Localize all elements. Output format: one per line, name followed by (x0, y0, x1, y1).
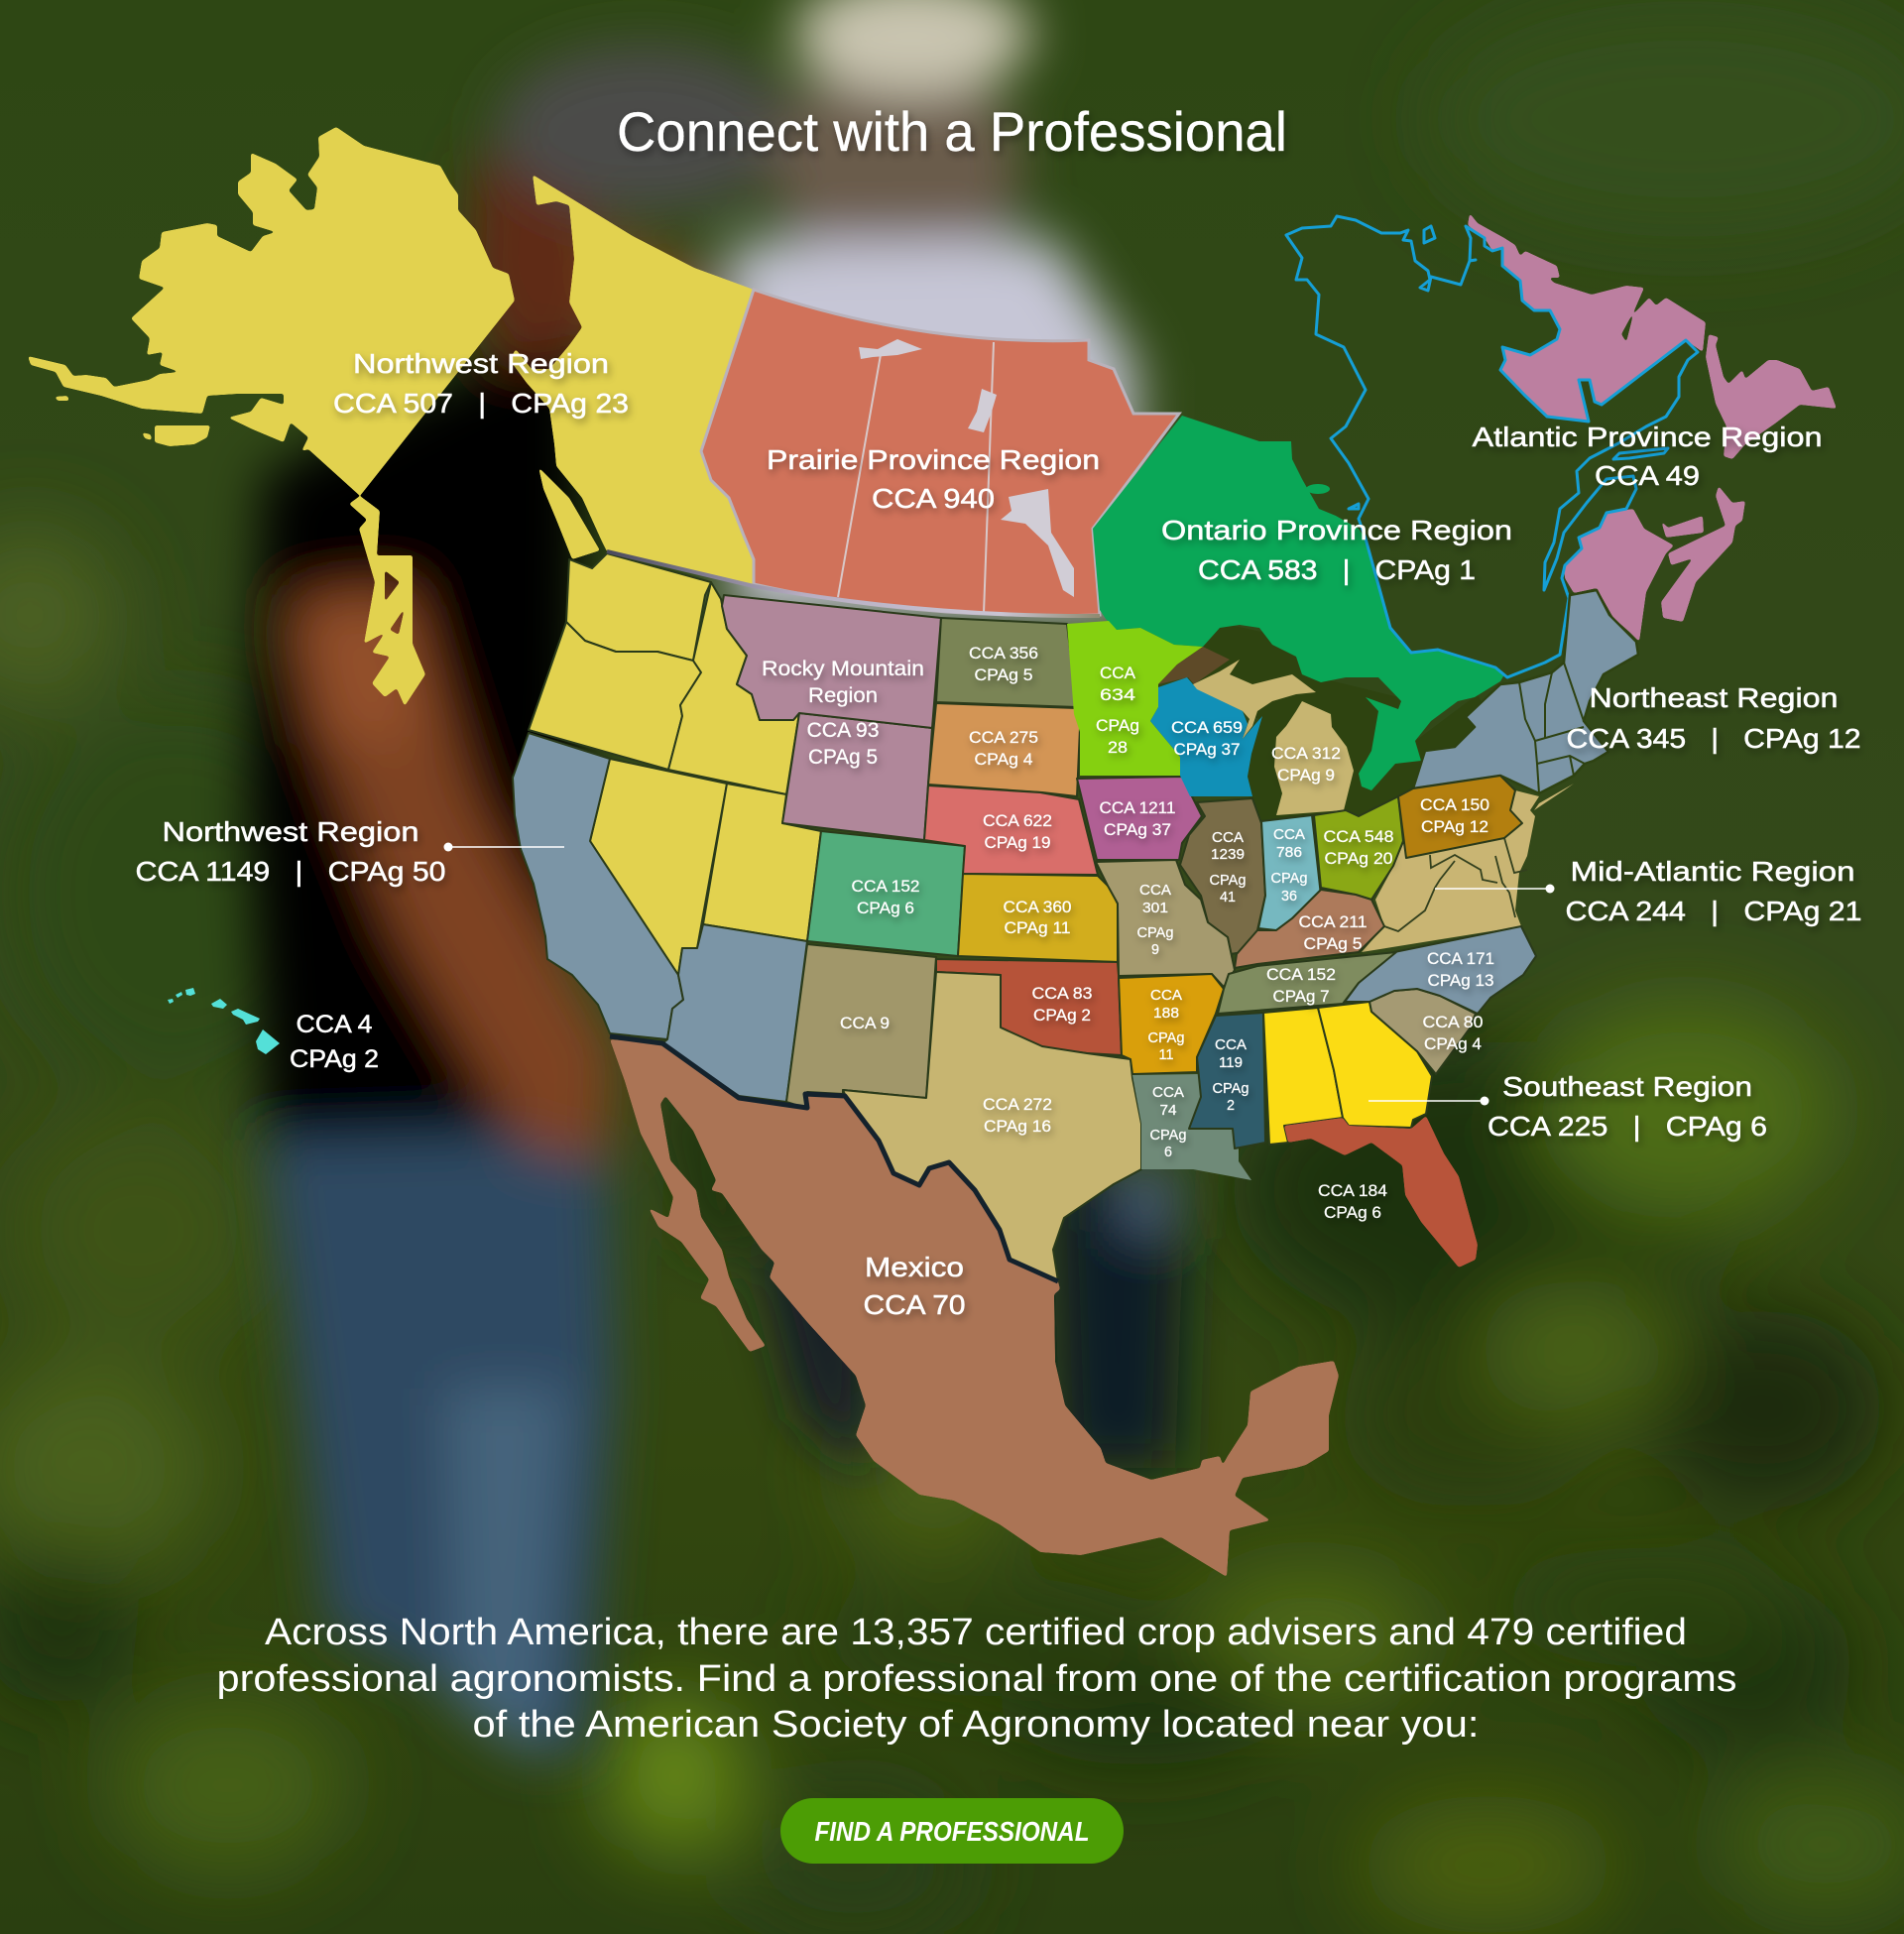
label: Hawaii (290, 1011, 379, 1073)
label: Prairie Province Region (767, 444, 1100, 514)
button: find a professional: FIND A PROFESSIONAL (815, 1816, 1089, 1847)
state: Arkansas (1119, 974, 1224, 1074)
label: Rocky Mountain Region (762, 658, 924, 769)
label: Indiana: CCA (1273, 826, 1305, 843)
label: Southeast Region: CCA 225 | CPAg 6 (1488, 1111, 1767, 1142)
state: Missouri (1096, 860, 1235, 987)
label: Northeast Region (1567, 682, 1860, 754)
state: Michigan (1193, 660, 1354, 815)
state: Kentucky (1235, 890, 1384, 968)
label: Iowa (1099, 798, 1176, 839)
Lake Superior tip (1158, 647, 1230, 684)
label: Minnesota: 28 (1108, 738, 1128, 757)
label: Illinois: CCA (1212, 829, 1244, 846)
state: Illinois (1180, 798, 1265, 954)
label: Arkansas: 11 (1158, 1046, 1174, 1063)
state: Wisconsin (1150, 677, 1262, 796)
state: Kansas (958, 874, 1118, 962)
state: Idaho (668, 582, 799, 794)
label: South Dakota: CCA 275 (969, 728, 1038, 747)
label: Mexico: Mexico (865, 1252, 964, 1282)
label: North Dakota: CPAg 5 (974, 665, 1033, 684)
white shirt (729, 238, 1135, 615)
text block: summary paragraph (216, 1612, 1737, 1746)
state: Oregon (529, 622, 701, 770)
label: Missouri: 9 (1151, 941, 1159, 958)
label: Wisconsin: CPAg 37 (1174, 740, 1240, 759)
label: Nebraska: CPAg 19 (984, 833, 1051, 852)
Newfoundland (1706, 334, 1837, 459)
label: Florida (1318, 1181, 1387, 1222)
label: Northwest Region Alaska and BC: CCA 507 | CPAg 23 (333, 388, 629, 419)
label: Ontario Province Region: CCA 583 | CPAg 1 (1198, 554, 1476, 585)
arm and hand (298, 585, 615, 1160)
label: Tennessee: CPAg 7 (1273, 987, 1329, 1006)
label: Kentucky: CCA 211 (1299, 912, 1367, 931)
label: Louisiana: 74 (1160, 1102, 1176, 1119)
label: Illinois: 41 (1220, 889, 1236, 906)
label: Colorado (851, 877, 920, 917)
label: Pennsylvania: CCA 150 (1420, 795, 1489, 814)
label: Atlantic Province Region: CCA 49 (1595, 460, 1700, 491)
label: Arkansas: CPAg (1148, 1029, 1184, 1046)
state: Nebraska (924, 786, 1098, 875)
label: Louisiana: CPAg (1150, 1127, 1186, 1144)
text block: summary paragraph: professional agronomists. Find a professional from one of the certification programs (216, 1658, 1737, 1700)
label: Kentucky (1299, 912, 1367, 953)
label: Southeast Region (1488, 1071, 1767, 1142)
label: Illinois (1210, 829, 1246, 906)
label: Mid-Atlantic Region (1565, 856, 1862, 926)
New Brunswick (1564, 509, 1674, 642)
label: Louisiana: 6 (1164, 1144, 1172, 1160)
label: Rocky Mountain Region: CCA 93 (807, 719, 879, 742)
label: Mississippi (1212, 1036, 1250, 1114)
label: Florida: CPAg 6 (1324, 1203, 1381, 1222)
label: Missouri: 301 (1142, 900, 1168, 916)
state: Oklahoma (936, 959, 1122, 1055)
dark legs person 2 (1051, 1170, 1185, 1468)
lakes in prairie provinces (859, 339, 1074, 597)
label: Rocky Mountain Region: Rocky Mountain (762, 658, 924, 680)
state: South Carolina (1369, 989, 1476, 1074)
Nova Scotia (1661, 486, 1745, 622)
label: North Carolina (1427, 949, 1494, 990)
label: Ohio (1323, 827, 1394, 868)
Great Lakes shadow (1175, 623, 1497, 823)
label: Ontario Province Region (1161, 515, 1512, 585)
label: Mississippi: CPAg (1212, 1080, 1250, 1097)
label: Rocky Mountain Region: Region (808, 684, 878, 707)
label: North Dakota (969, 644, 1038, 684)
Hawaii islands (168, 988, 280, 1054)
label: Southeast Region: Southeast Region (1502, 1071, 1752, 1102)
state: Montana (722, 595, 941, 728)
state: Washington (566, 553, 711, 661)
label: Colorado: CCA 152 (851, 877, 920, 896)
state: Colorado (807, 831, 965, 956)
label: Kentucky: CPAg 5 (1303, 934, 1363, 953)
Quebec outline (1286, 216, 1698, 677)
panel: Prairie Province Region (701, 290, 1179, 616)
map of North America (28, 127, 1837, 1577)
label: Arkansas: CCA (1150, 987, 1182, 1004)
label: Rocky Mountain Region: CPAg 5 (808, 746, 878, 769)
label: Illinois: CPAg (1210, 872, 1246, 889)
text block: summary paragraph: of the American Society of Agronomy located near you: (472, 1704, 1480, 1746)
US-Mexico border line (610, 1036, 1058, 1281)
label: Arkansas: 188 (1153, 1005, 1179, 1022)
Quebec and Labrador (1468, 213, 1706, 422)
label: Hawaii: CPAg 2 (290, 1045, 379, 1073)
panel: Mid-Atlantic Region (1362, 784, 1574, 952)
jeans person 1 (263, 1131, 615, 1765)
panel: Atlantic Province Region (1286, 213, 1837, 677)
label: Minnesota: 634 (1100, 685, 1135, 704)
leader line: Southeast Region (1368, 1097, 1489, 1105)
state: Tennessee (1218, 952, 1396, 1014)
label: Iowa: CPAg 37 (1104, 820, 1171, 839)
label: Northwest Region west coast (135, 816, 446, 887)
label: Wisconsin: CCA 659 (1171, 718, 1243, 737)
state: Florida (1284, 1116, 1478, 1268)
label: Kansas: CPAg 11 (1004, 918, 1071, 937)
label: Ontario Province Region: Ontario Province Region (1161, 515, 1512, 545)
US-Canada border line (607, 551, 1100, 616)
label: Missouri: CCA (1139, 882, 1171, 899)
label: Louisiana: CCA (1152, 1084, 1184, 1101)
state: Indiana (1258, 815, 1321, 930)
label: Atlantic Province Region: Atlantic Province Region (1472, 422, 1823, 452)
label: Michigan: CCA 312 (1271, 744, 1341, 763)
state: North Dakota (936, 618, 1077, 707)
label: Hawaii: CCA 4 (296, 1011, 373, 1038)
label: Nebraska (983, 811, 1052, 852)
leader line: Mid-Atlantic Region (1435, 885, 1555, 893)
state: Ohio (1314, 796, 1403, 900)
label: Mississippi: 119 (1219, 1054, 1243, 1071)
label: Kansas: CCA 360 (1004, 898, 1071, 916)
label: Mississippi: CCA (1215, 1036, 1247, 1053)
label: Atlantic Province Region (1472, 422, 1823, 491)
label: North Dakota: CCA 356 (969, 644, 1038, 663)
label: Ohio: CCA 548 (1323, 827, 1394, 846)
label: Florida: CCA 184 (1318, 1181, 1387, 1200)
label: Mexico: CCA 70 (863, 1289, 966, 1320)
panel: British Columbia and Yukon (510, 175, 754, 587)
state: Arizona (662, 924, 807, 1102)
label: Nebraska: CCA 622 (983, 811, 1052, 830)
Vancouver Island (538, 467, 600, 559)
state: Pennsylvania (1398, 776, 1522, 858)
label: Indiana: 36 (1281, 888, 1297, 905)
state: Nevada (590, 759, 727, 975)
state: Louisiana (1132, 1074, 1251, 1180)
label: South Carolina (1422, 1013, 1484, 1053)
label: Indiana: CPAg (1271, 870, 1307, 887)
label: Missouri (1136, 882, 1174, 958)
heads (496, 45, 793, 213)
label: Texas (983, 1095, 1052, 1136)
label: Arkansas (1148, 987, 1184, 1063)
label: Mid-Atlantic Region: CCA 244 | CPAg 21 (1565, 896, 1862, 926)
state: Georgia (1318, 1002, 1432, 1128)
label: Mid-Atlantic Region: Mid-Atlantic Region (1571, 856, 1854, 887)
label: Oklahoma: CPAg 2 (1033, 1006, 1091, 1025)
label: Pennsylvania (1420, 795, 1489, 836)
label: Illinois: 1239 (1211, 846, 1245, 863)
label: Tennessee: CCA 152 (1266, 965, 1336, 984)
label: Tennessee (1266, 965, 1336, 1006)
label: Mississippi: 2 (1227, 1097, 1235, 1114)
panel: Northwest Region Alaska (28, 127, 515, 706)
label: Louisiana (1150, 1084, 1186, 1160)
label: Northwest Region west coast: Northwest Region (163, 816, 418, 847)
state: South Dakota (928, 703, 1080, 796)
label: Prairie Province Region: Prairie Province Region (767, 444, 1100, 475)
label: North Carolina: CPAg 13 (1428, 971, 1493, 990)
label: Ohio: CPAg 20 (1325, 849, 1392, 868)
label: Oklahoma (1031, 984, 1093, 1025)
label: South Carolina: CPAg 4 (1424, 1034, 1482, 1053)
panel: Northeast Region states (1413, 590, 1638, 793)
label: Northwest Region Alaska and BC (333, 348, 629, 419)
label: Kansas (1004, 898, 1071, 937)
title: Connect with a Professional (617, 100, 1287, 163)
label: South Dakota: CPAg 4 (974, 750, 1033, 769)
label: Minnesota: CPAg (1096, 716, 1139, 735)
state: California (513, 733, 683, 1039)
label: Minnesota (1096, 664, 1139, 757)
state: Iowa (1077, 777, 1202, 860)
label: Missouri: CPAg (1136, 924, 1174, 941)
label: Indiana: 786 (1276, 844, 1302, 861)
label: Michigan: CPAg 9 (1277, 766, 1335, 785)
black shirt (248, 327, 605, 1141)
label: New Mexico: CCA 9 (840, 1014, 890, 1032)
label: Northwest Region Alaska and BC: Northwest Region (353, 348, 609, 379)
state: Utah (703, 784, 821, 941)
label: Wisconsin (1171, 718, 1243, 759)
label: South Carolina: CCA 80 (1422, 1013, 1484, 1031)
leader line: west coast Northwest Region (444, 843, 564, 851)
label: North Carolina: CCA 171 (1427, 949, 1494, 968)
Prince Edward Island (1661, 516, 1704, 538)
label: Northwest Region west coast: CCA 1149 | CPAg 50 (135, 856, 446, 887)
label: Northeast Region: CCA 345 | CPAg 12 (1567, 723, 1860, 754)
label: Iowa: CCA 1211 (1099, 798, 1176, 817)
state: North Carolina (1345, 926, 1536, 1014)
state: Texas (843, 972, 1141, 1281)
state: Alabama (1263, 1008, 1343, 1145)
label: Minnesota: CCA (1100, 664, 1136, 682)
label: Texas: CCA 272 (983, 1095, 1052, 1114)
label: Northeast Region: Northeast Region (1589, 682, 1839, 713)
panel: Ontario Province Region (1093, 416, 1504, 790)
label: Prairie Province Region: CCA 940 (872, 483, 995, 514)
text block: summary paragraph: Across North America, there are 13,357 certified crop advisers and 479 certified (265, 1612, 1687, 1653)
state: Mississippi (1189, 1013, 1265, 1148)
map labels (135, 348, 1862, 1320)
label: Oklahoma: CCA 83 (1031, 984, 1093, 1003)
panel: Mexico (610, 1039, 1339, 1577)
state: New Mexico (786, 944, 936, 1108)
label: Texas: CPAg 16 (984, 1117, 1051, 1136)
label: Mexico (863, 1252, 966, 1320)
label: Colorado: CPAg 6 (857, 899, 914, 917)
Aleutian islands (55, 396, 210, 446)
state: Wyoming (782, 713, 932, 840)
label: Michigan (1271, 744, 1341, 785)
label: Pennsylvania: CPAg 12 (1421, 817, 1488, 836)
label: Indiana (1271, 826, 1307, 905)
button: find a professional (780, 1798, 1124, 1864)
label: South Dakota (969, 728, 1038, 769)
state: Minnesota (1067, 621, 1203, 776)
